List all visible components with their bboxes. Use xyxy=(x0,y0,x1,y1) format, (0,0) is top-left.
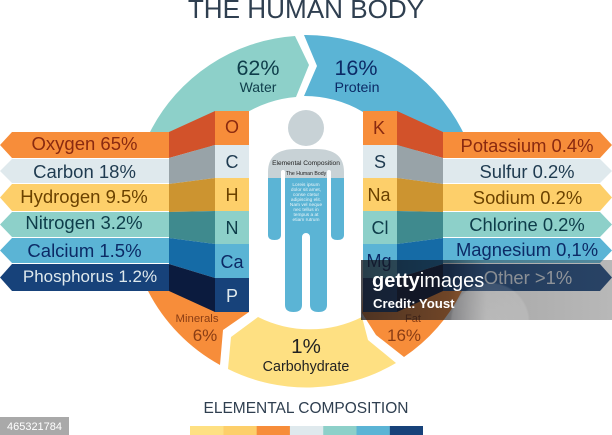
bar: potassium: Potassium 0.4% xyxy=(461,135,593,156)
image id badge: 465321784 xyxy=(7,421,62,433)
body upper (grey) xyxy=(268,149,344,178)
panel: carbohydrate segment: Carbohydrate xyxy=(263,359,349,375)
figure heading: Elemental Composition xyxy=(272,160,340,167)
watermark: getty images: gettyimages xyxy=(372,270,484,292)
panel: minerals segment xyxy=(148,291,249,365)
panel: left element squares: Ca xyxy=(220,252,244,272)
bar: calcium xyxy=(0,238,169,263)
bar: calcium: Calcium 1.5% xyxy=(27,240,142,261)
bar: oxygen xyxy=(0,132,169,158)
panel: right element squares: S xyxy=(374,152,386,172)
panel: right element bars xyxy=(443,132,612,291)
figure body text: nec tellus in xyxy=(293,207,319,213)
panel: right element squares xyxy=(363,111,397,312)
figure body text xyxy=(290,182,322,223)
figure body text: conse ctetur xyxy=(293,192,319,198)
watermark: getty images xyxy=(361,260,612,320)
figure subheading: The Human Body xyxy=(286,171,327,177)
panel: carbohydrate segment xyxy=(228,317,396,387)
bar: sulfur: Sulfur 0.2% xyxy=(479,161,575,182)
bar: nitrogen xyxy=(0,212,169,237)
panel: right element squares: K xyxy=(373,118,385,138)
panel: left element squares: N xyxy=(226,218,238,238)
watermark: getty images: Credit: Youst xyxy=(373,296,455,311)
bar: sodium: Sodium 0.2% xyxy=(473,187,582,208)
bar: other: Other >1% xyxy=(484,267,572,288)
panel: protein segment xyxy=(304,35,463,155)
heading: elemental composition: ELEMENTAL COMPOSITION xyxy=(204,400,408,417)
bar: magnesium: Magnesium 0,1% xyxy=(456,239,598,260)
bar: carbon: Carbon 18% xyxy=(33,161,136,182)
bar: potassium xyxy=(443,132,612,158)
panel: fat segment xyxy=(362,291,462,357)
bar: chlorine: Chlorine 0.2% xyxy=(469,214,585,235)
figure body text: tempus a at xyxy=(293,212,319,218)
bar: chlorine xyxy=(443,212,612,237)
legend colour strip xyxy=(190,426,423,435)
bar: sodium xyxy=(443,184,612,211)
panel: water segment xyxy=(150,36,309,155)
figure body text: adipiscing elit. xyxy=(291,197,321,203)
bar: phosphorus xyxy=(0,264,169,291)
panel: fat segment: 16% xyxy=(387,326,421,345)
figure body text: Nam vel neque xyxy=(290,202,322,208)
panel: right element squares: Mg xyxy=(366,251,392,271)
panel: right connector shades xyxy=(397,111,443,312)
panel: fat segment: Fat xyxy=(405,313,421,325)
panel: right element squares: Cl xyxy=(372,218,388,238)
figure body text: Loreis ipsum xyxy=(292,182,320,188)
panel: left element squares: P xyxy=(226,286,238,306)
panel: water segment: Water xyxy=(240,79,277,95)
panel: left element squares xyxy=(215,111,249,312)
panel: left element squares: C xyxy=(226,152,238,172)
panel: left element squares: O xyxy=(225,117,239,137)
panel: minerals segment: 6% xyxy=(193,326,217,345)
panel: left element bars xyxy=(0,132,169,291)
panel: minerals segment: Minerals xyxy=(175,313,219,325)
panel: carbohydrate segment: 1% xyxy=(291,335,321,358)
bar: phosphorus: Phosphorus 1.2% xyxy=(23,267,157,286)
panel: protein segment: 16% xyxy=(334,56,378,80)
bar: hydrogen xyxy=(0,184,169,211)
body lower (blue) xyxy=(268,178,344,312)
panel: left element squares: H xyxy=(226,185,238,205)
bar: carbon xyxy=(0,159,169,183)
bar: nitrogen: Nitrogen 3.2% xyxy=(25,212,143,233)
panel: right element squares: Na xyxy=(367,185,391,205)
panel: left connector shades xyxy=(169,111,215,312)
bar: oxygen: Oxygen 65% xyxy=(32,133,137,154)
bar: sulfur xyxy=(443,159,612,183)
bar: other xyxy=(443,264,612,291)
figure body text: dolor sit amet, xyxy=(291,187,321,193)
image id badge xyxy=(0,417,69,435)
icon: head xyxy=(288,110,324,146)
icon: human figure xyxy=(268,110,344,312)
panel: protein segment: Protein xyxy=(335,80,379,96)
bar: hydrogen: Hydrogen 9.5% xyxy=(20,186,148,207)
panel: water segment: 62% xyxy=(236,56,280,80)
figure body text: etiam rutrum xyxy=(293,217,319,223)
